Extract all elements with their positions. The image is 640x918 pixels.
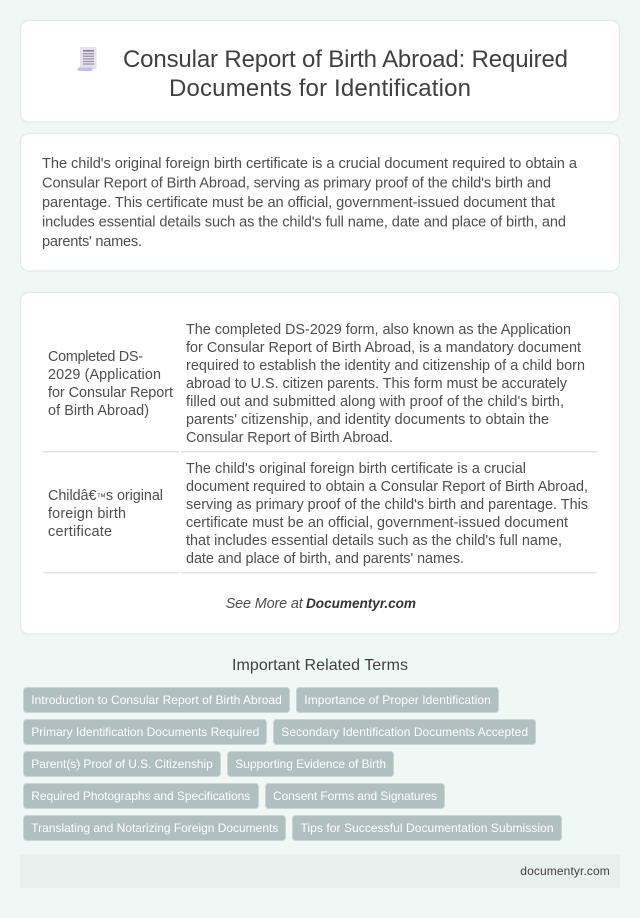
row label: of Birth Abroad) — [48, 403, 149, 419]
row description — [186, 461, 588, 567]
tag: Parent(s) Proof of U.S. Citizenship — [31, 757, 213, 771]
tag: Primary Identification Documents Required — [31, 725, 259, 739]
row description: document required to obtain a Consular Report of Birth Abroad, — [186, 479, 588, 495]
panel: header — [20, 20, 620, 122]
text block: introduction: Consular Report of Birth Abroad, serving as primary proof of the child's birth and — [42, 176, 551, 192]
row description: The completed DS-2029 form, also known as the Application — [186, 322, 571, 338]
row description: date and place of birth, and parents' names. — [186, 551, 464, 567]
row label: Childâ€™s original — [48, 488, 163, 504]
row label: Completed DS- — [48, 349, 143, 365]
footer: documentyr.com — [520, 864, 610, 878]
tag: Tips for Successful Documentation Submission — [300, 821, 554, 835]
row label: for Consular Report — [48, 385, 173, 401]
row description: for Consular Report of Birth Abroad, is a mandatory document — [186, 340, 581, 356]
title: Consular Report of Birth Abroad: Required — [123, 46, 568, 73]
tag — [24, 752, 220, 776]
tag — [274, 720, 536, 744]
row description: Consular Report of Birth Abroad. — [186, 430, 393, 446]
row label: 2029 (Application — [48, 367, 161, 383]
tag: Translating and Notarizing Foreign Documents — [31, 821, 278, 835]
table row: birth certificate — [43, 461, 597, 573]
text block: introduction: The child's original foreign birth certificate is a crucial document required to obtain a — [42, 156, 578, 172]
tag — [24, 816, 286, 840]
tag — [24, 688, 290, 712]
title — [123, 46, 568, 102]
tag — [292, 816, 562, 840]
tag: Consent Forms and Signatures — [273, 789, 437, 803]
tag — [228, 752, 394, 776]
row description — [186, 322, 585, 446]
see more link: Documentyr.com — [306, 596, 416, 611]
tag: Supporting Evidence of Birth — [235, 757, 386, 771]
row description: serving as primary proof of the child's birth and parentage. This — [186, 497, 588, 513]
heading: related terms: Important Related Terms — [232, 657, 408, 674]
row description: abroad to U.S. citizen parents. This form must be accurately — [186, 376, 568, 392]
row description: required to establish the identity and citizenship of a child born — [186, 358, 585, 374]
row description: certificate must be an official, government-issued document — [186, 515, 568, 531]
row description: that includes essential details such as the child's full name, — [186, 533, 562, 549]
tag: Required Photographs and Specifications — [31, 789, 250, 803]
text block: introduction: parents' names. — [42, 234, 142, 250]
row label: foreign birth — [48, 506, 126, 522]
footer — [20, 854, 620, 888]
row label: certificate — [48, 524, 112, 540]
tag: Introduction to Consular Report of Birth Abroad — [31, 693, 282, 707]
row description: The child's original foreign birth certificate is a crucial — [186, 461, 526, 477]
row description: parents' citizenship, and identity documents to obtain the — [186, 412, 549, 428]
panel: documents table — [20, 292, 620, 634]
tag — [266, 784, 444, 808]
text block: introduction: parentage. This certificate must be an official, government-issued document that — [42, 195, 555, 211]
tag — [24, 784, 258, 808]
icon: document scroll — [78, 47, 96, 71]
tag — [24, 720, 266, 744]
see more link: See More at — [226, 596, 304, 612]
text block: introduction — [42, 156, 578, 250]
panel: related term tags — [24, 688, 562, 840]
tag — [296, 688, 498, 712]
title: Documents for Identification — [169, 75, 471, 102]
row label — [48, 488, 163, 540]
table row: DS-2029 — [43, 322, 597, 452]
text block: introduction: includes essential details such as the child's full name, date and place of birth, and — [42, 214, 566, 230]
row label — [48, 349, 173, 419]
panel: introduction — [20, 134, 620, 271]
row description: filled out and submitted along with proof of the child's birth, — [186, 394, 564, 410]
see more link — [226, 596, 416, 612]
tag: Importance of Proper Identification — [304, 693, 491, 707]
tag: Secondary Identification Documents Accepted — [281, 725, 528, 739]
